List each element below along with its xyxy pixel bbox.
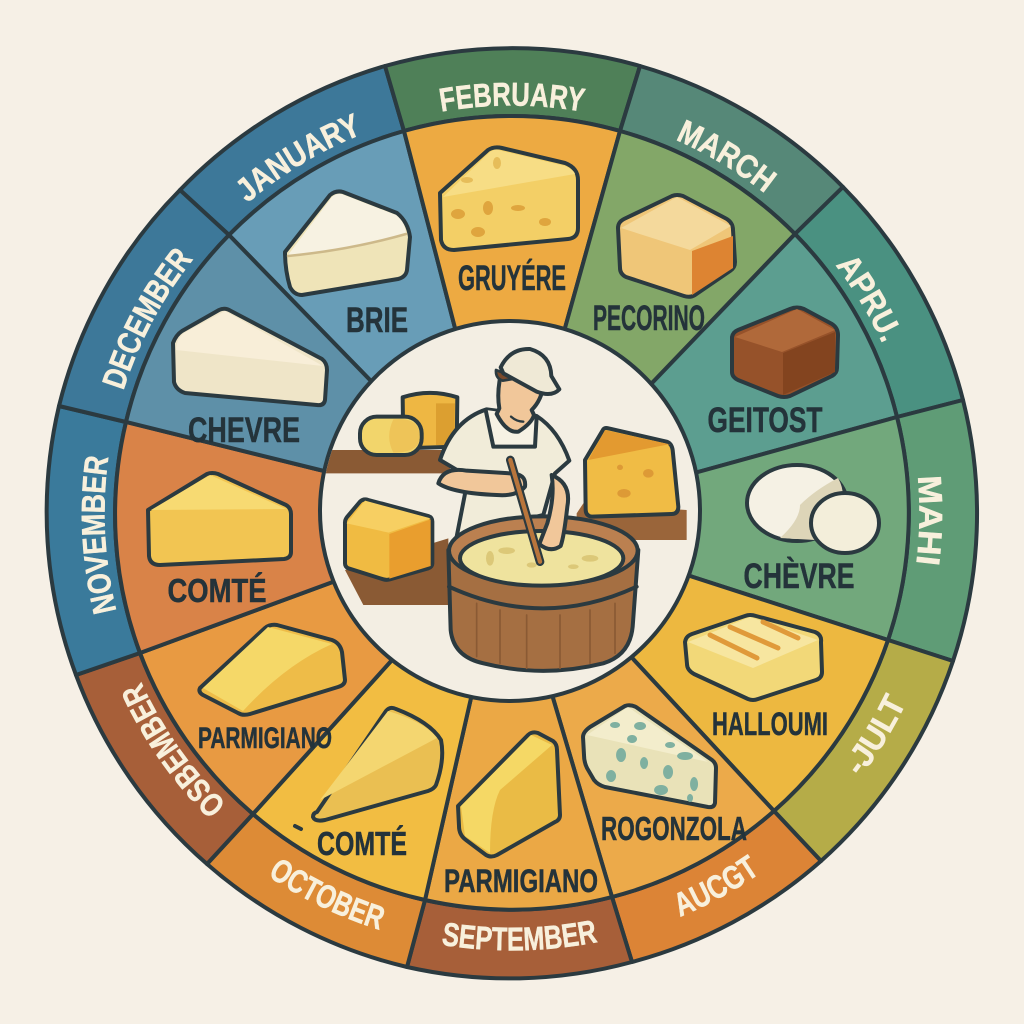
segment: April (795, 187, 963, 417)
cheese: small wheel (360, 417, 422, 455)
label: Parmigiano bottom: PARMIGIANO (444, 863, 598, 899)
label: August: AUCGT (677, 854, 756, 918)
icon: comte bottom (295, 708, 442, 829)
segment: September (407, 897, 632, 978)
icon: chevre left (173, 309, 327, 405)
icon: rogonzola (583, 705, 716, 807)
smile (511, 417, 523, 422)
segment: February (385, 48, 640, 131)
left arm (438, 470, 525, 495)
label: Parmigiano left: PARMIGIANO (198, 722, 332, 755)
curd spots (486, 547, 598, 569)
icon: parmigiano left (199, 625, 345, 715)
wedge: Gruyere (404, 116, 620, 513)
label: July: -JULT (852, 692, 904, 773)
wedge: Chevre right (512, 417, 909, 640)
neck and head (497, 375, 543, 432)
segment: January (180, 66, 404, 235)
wedge: Chevre left (126, 235, 512, 513)
wedge: Geitost (512, 234, 897, 513)
wedge: Comte left (115, 422, 512, 653)
label: September: SEPTEMBER (442, 920, 598, 951)
label: Geitost: GEITOST (708, 401, 822, 440)
wooden tub (448, 516, 638, 671)
icon: geitost (732, 308, 838, 397)
hair (496, 370, 517, 381)
label: Comte left: COMTÉ (168, 572, 266, 609)
wedge: Pecorino (512, 131, 795, 513)
right arm reaching into tub (539, 475, 568, 549)
segment: August (612, 811, 821, 962)
cheese: cylinder on shelf (403, 393, 457, 448)
label: Chevre right: CHÈVRE (744, 556, 854, 596)
wedge: Rogonzola (512, 513, 774, 897)
label: January: JANUARY (237, 112, 356, 201)
icon: pecorino (618, 195, 735, 297)
icon: brie (285, 191, 410, 295)
hat (501, 349, 559, 394)
label: Pecorino: PECORINO (593, 299, 705, 338)
shelf: lower left (345, 538, 448, 605)
cheese name labels (168, 258, 854, 899)
label: Osebember: OSBEMBER (122, 682, 222, 816)
label: May: MAHI (916, 476, 942, 565)
wedge: Parmigiano left (140, 513, 512, 814)
label: Chevre left: CHEVRE (188, 411, 300, 450)
stirring stick (510, 460, 540, 562)
cheese wedges (115, 116, 909, 910)
segment: November (47, 406, 140, 675)
wedge: Brie (229, 131, 512, 513)
shelf: upper left (323, 450, 450, 473)
label: Halloumi: HALLOUMI (712, 706, 828, 742)
label: February: FEBRUARY (439, 82, 586, 112)
shelf: right (577, 503, 687, 540)
icon: comte left (148, 473, 291, 565)
wedge: Comte bottom (253, 513, 512, 900)
label: Rogonzola: ROGONZOLA (601, 810, 747, 847)
icon: gruyere (440, 147, 578, 250)
apron (486, 410, 537, 447)
label: March: MARCH (676, 120, 778, 193)
label: December: DECEMBER (102, 248, 194, 390)
icon: parmigiano bottom (458, 732, 560, 856)
segment: Osebember (76, 653, 253, 864)
icon: chevre fresh (747, 465, 879, 553)
segment: March (620, 66, 843, 234)
label: November: NOVEMBER (81, 456, 116, 614)
label: April: APRU. (836, 258, 899, 342)
label: October: OCTOBER (272, 860, 384, 930)
cheesemaker torso (438, 349, 569, 537)
segment: October (207, 814, 425, 967)
cheese: big wedge (585, 428, 678, 517)
label: Brie: BRIE (346, 301, 408, 340)
wedge: Parmigiano bottom (425, 513, 612, 910)
shirt (440, 409, 569, 537)
centre illustration: cheesemaker (320, 321, 700, 701)
month labels (81, 82, 942, 951)
icon: halloumi (685, 615, 822, 700)
segment: May (888, 400, 977, 661)
label: Comte bottom: COMTÉ (317, 825, 407, 862)
label: Gruyere: GRUYÉRE (458, 258, 566, 298)
wedge: Halloumi (512, 513, 888, 811)
segment: July (774, 640, 953, 861)
cheese: cube (345, 499, 432, 580)
segment: December (59, 190, 229, 422)
